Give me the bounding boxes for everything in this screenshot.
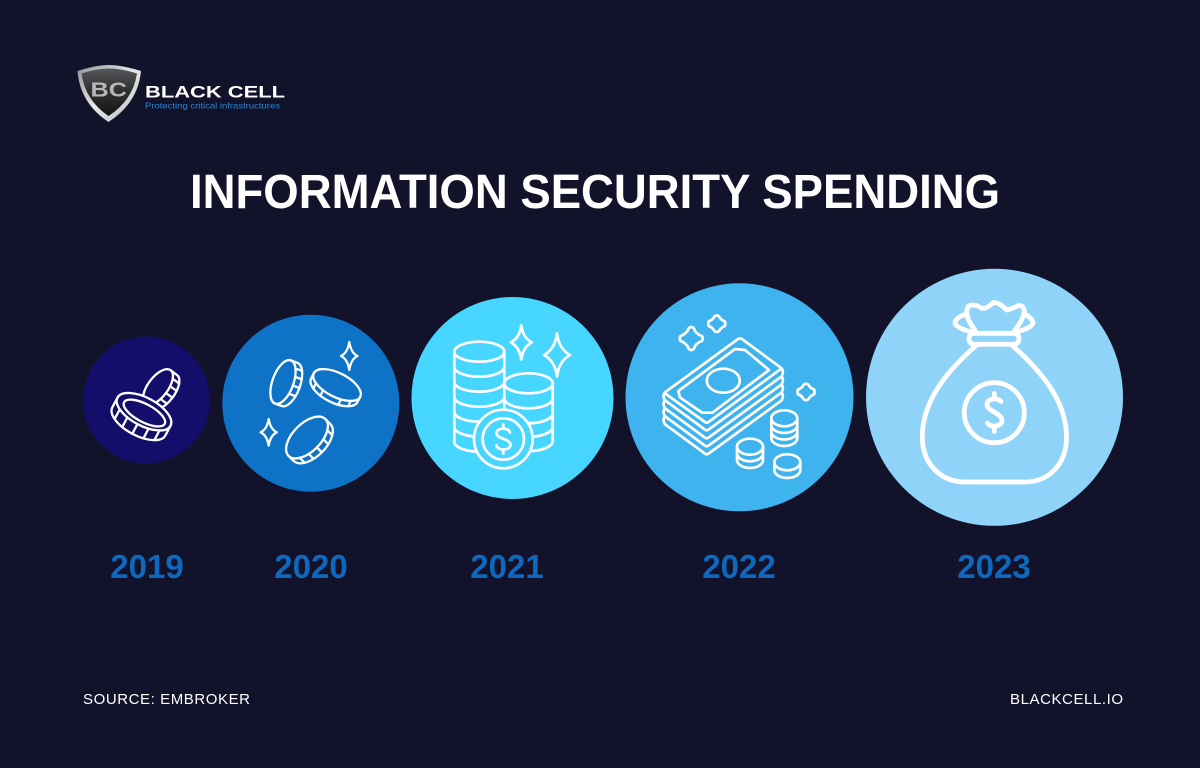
icon: coin stack low (774, 454, 800, 478)
icon: sparkle upper (341, 342, 358, 370)
icon: tall coin stack (454, 342, 504, 452)
tagline: Protecting critical infrastructures (145, 100, 280, 110)
circle 2022: banknotes icon (626, 283, 854, 511)
circle 2019: coins icon (83, 336, 210, 464)
icon: bag body (922, 345, 1066, 482)
source note: SOURCE: EMBROKER (83, 691, 250, 708)
icon: shield: BC (90, 80, 127, 102)
icon: sparkle large (544, 334, 570, 376)
icon: coin upper right (306, 363, 366, 413)
icon: sparkle left (680, 327, 703, 350)
brand name: BLACK CELL (145, 83, 285, 102)
year label 2023: 2023 (957, 548, 1031, 585)
icon: coin lower (279, 409, 340, 471)
year label 2021: 2021 (470, 548, 544, 585)
icon: back coin (137, 364, 185, 415)
icon: bag ruffle (967, 302, 1024, 330)
icon: front coin (106, 385, 177, 448)
icon: banknote stack (664, 338, 783, 454)
logo: Black Cell (78, 65, 285, 122)
year label 2022: 2022 (702, 548, 776, 585)
icon: sparkle lower (261, 419, 277, 446)
icon: shield (78, 65, 141, 122)
icon: coin stack middle (737, 439, 763, 468)
icon: sparkle small (511, 326, 532, 360)
icon: dollar sign (987, 394, 1002, 432)
icon: sparkle top (708, 316, 725, 332)
icon: sparkle right (798, 384, 815, 400)
icon: short coin stack (504, 373, 553, 451)
icon: coin upper left (265, 357, 307, 410)
circle 2020: scattered coins icon (222, 315, 399, 492)
icon: coin stack right (771, 410, 797, 446)
icon: dollar coin (474, 410, 533, 468)
icon: dollar circle (964, 383, 1024, 443)
year label 2020: 2020 (274, 548, 348, 585)
circle 2023: money bag icon (866, 269, 1123, 526)
circle 2021: coin stacks icon (412, 297, 614, 499)
icon: bag tie band (969, 333, 1019, 344)
website: BLACKCELL.IO (1010, 691, 1123, 708)
year label 2019: 2019 (110, 548, 184, 585)
icon: bag string (955, 314, 1033, 332)
title: INFORMATION SECURITY SPENDING (190, 166, 1000, 219)
